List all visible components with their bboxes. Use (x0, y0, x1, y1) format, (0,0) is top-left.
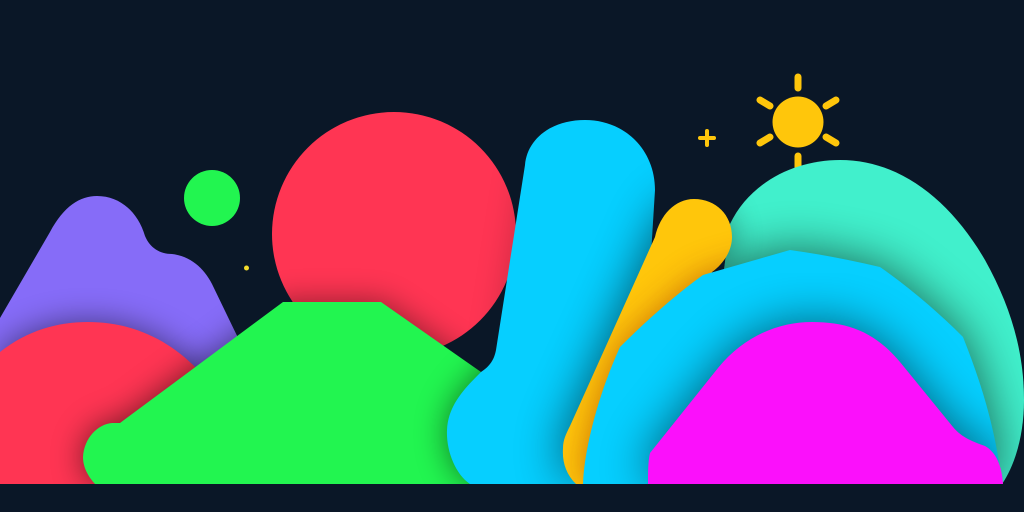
magenta dome (648, 322, 1003, 484)
green circle (184, 170, 240, 226)
small yellow dot (244, 266, 249, 270)
tall blue shape (446, 120, 655, 484)
red hill left (0, 322, 196, 484)
purple hill (0, 196, 237, 367)
icon: plus sparkle (700, 131, 714, 145)
teal dome (724, 160, 1024, 483)
red circle (272, 112, 516, 346)
icon: sun (760, 77, 836, 170)
yellow capsule (562, 199, 732, 484)
front blue dome (583, 250, 1003, 484)
green hill (83, 302, 481, 484)
